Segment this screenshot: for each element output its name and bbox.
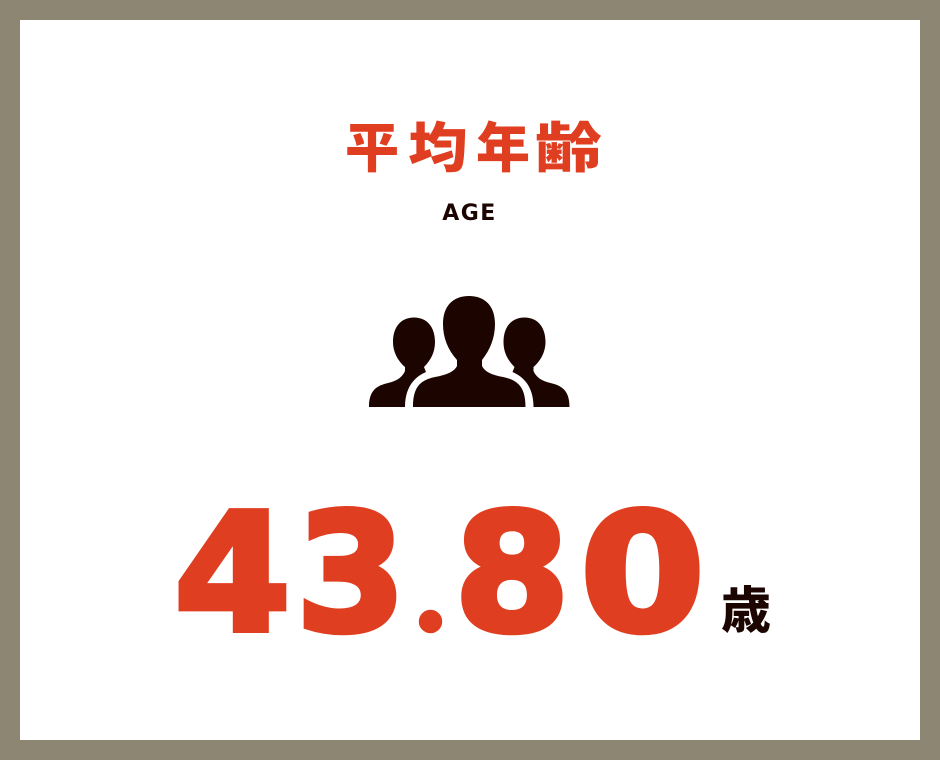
value: 43.80: 3 (296, 479, 406, 669)
value: 43.80: 4 (174, 479, 291, 669)
value: 43.80: 0 (580, 480, 705, 669)
subtitle: AGE: AGE (442, 201, 497, 226)
title: 平均年齢: 均 (408, 119, 468, 179)
title: 平均年齢: 年 (476, 119, 530, 179)
unit: 歳: 歳 (721, 583, 771, 639)
title: 平均年齢: 平 (345, 119, 399, 179)
title: 平均年齢: 齢 (535, 118, 602, 179)
icon: group of three people (369, 296, 570, 407)
value: 43.80: 8 (454, 479, 570, 669)
title: 平均年齢 (345, 118, 602, 179)
value: 43.80 (174, 479, 705, 669)
